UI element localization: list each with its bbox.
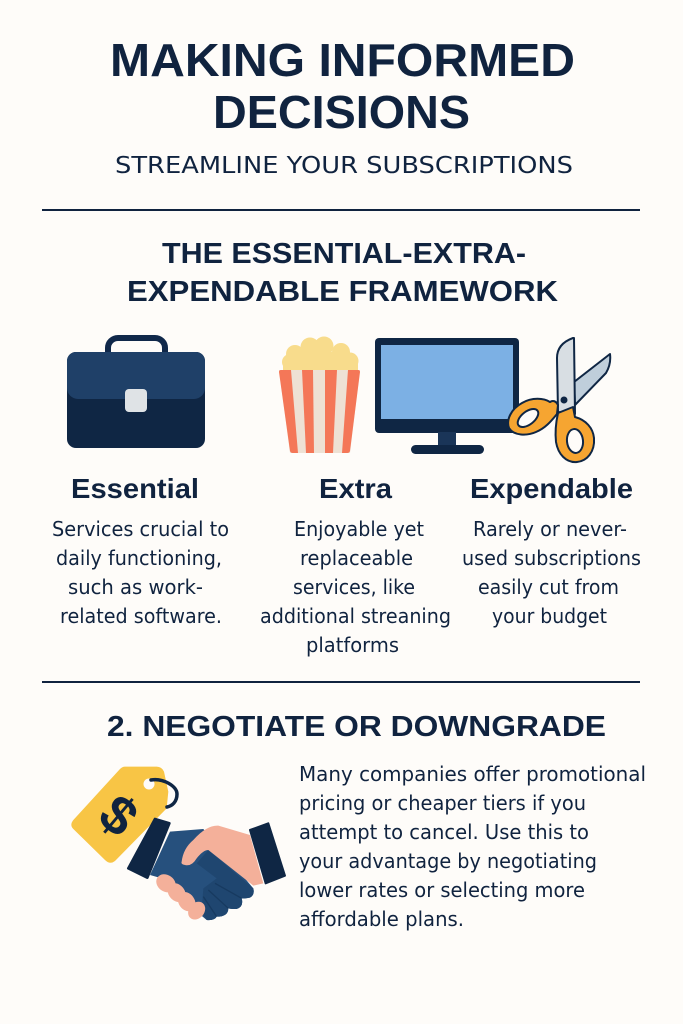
icon: scissors xyxy=(508,338,610,462)
text: negotiate description: Many companies offer promotional xyxy=(299,762,646,786)
text: expendable description: your budget xyxy=(492,604,607,628)
text: negotiate description: lower rates or selecting more xyxy=(299,878,585,902)
heading: framework: THE ESSENTIAL-EXTRA- xyxy=(162,238,526,270)
text: expendable description: easily cut from xyxy=(478,575,619,599)
text: essential description xyxy=(52,517,229,628)
text: negotiate description: your advantage by negotiating xyxy=(299,849,597,873)
label: Expendable: Expendable xyxy=(470,473,633,504)
label: Extra: Extra xyxy=(319,473,392,504)
heading: negotiate or downgrade: 2. NEGOTIATE OR DOWNGRADE xyxy=(107,711,606,743)
icon: price tag xyxy=(71,767,177,863)
text: essential description: daily functioning, xyxy=(56,546,222,570)
text: negotiate description: attempt to cancel. Use this to xyxy=(299,820,589,844)
text: extra description: additional streaning xyxy=(260,604,451,628)
heading: framework: EXPENDABLE FRAMEWORK xyxy=(127,276,558,308)
text: expendable description xyxy=(462,517,641,628)
dollar sign: $ xyxy=(88,783,149,848)
text: negotiate description xyxy=(299,762,646,931)
text: extra description: Enjoyable yet xyxy=(294,517,424,541)
icon: handshake xyxy=(128,819,285,923)
text: negotiate description: pricing or cheaper tiers if you xyxy=(299,791,586,815)
icon: monitor xyxy=(375,338,519,454)
title: DECISIONS xyxy=(213,86,470,138)
icon: briefcase xyxy=(67,338,205,448)
text: extra description: services, like xyxy=(293,575,415,599)
text: negotiate description: affordable plans. xyxy=(299,907,464,931)
text: essential description: related software. xyxy=(60,604,222,628)
text: essential description: such as work- xyxy=(68,575,203,599)
text: extra description: platforms xyxy=(306,633,399,657)
text: expendable description: Rarely or never- xyxy=(473,517,627,541)
text: essential description: Services crucial to xyxy=(52,517,229,541)
heading: framework xyxy=(127,238,558,308)
title: MAKING INFORMED xyxy=(110,34,575,86)
text: expendable description: used subscriptions xyxy=(462,546,641,570)
icon: popcorn xyxy=(279,336,360,453)
subtitle: STREAMLINE YOUR SUBSCRIPTIONS xyxy=(115,153,573,179)
text: extra description: replaceable xyxy=(300,546,413,570)
title xyxy=(110,34,575,138)
text: extra description xyxy=(260,517,451,657)
label: Essential: Essential xyxy=(71,473,199,504)
